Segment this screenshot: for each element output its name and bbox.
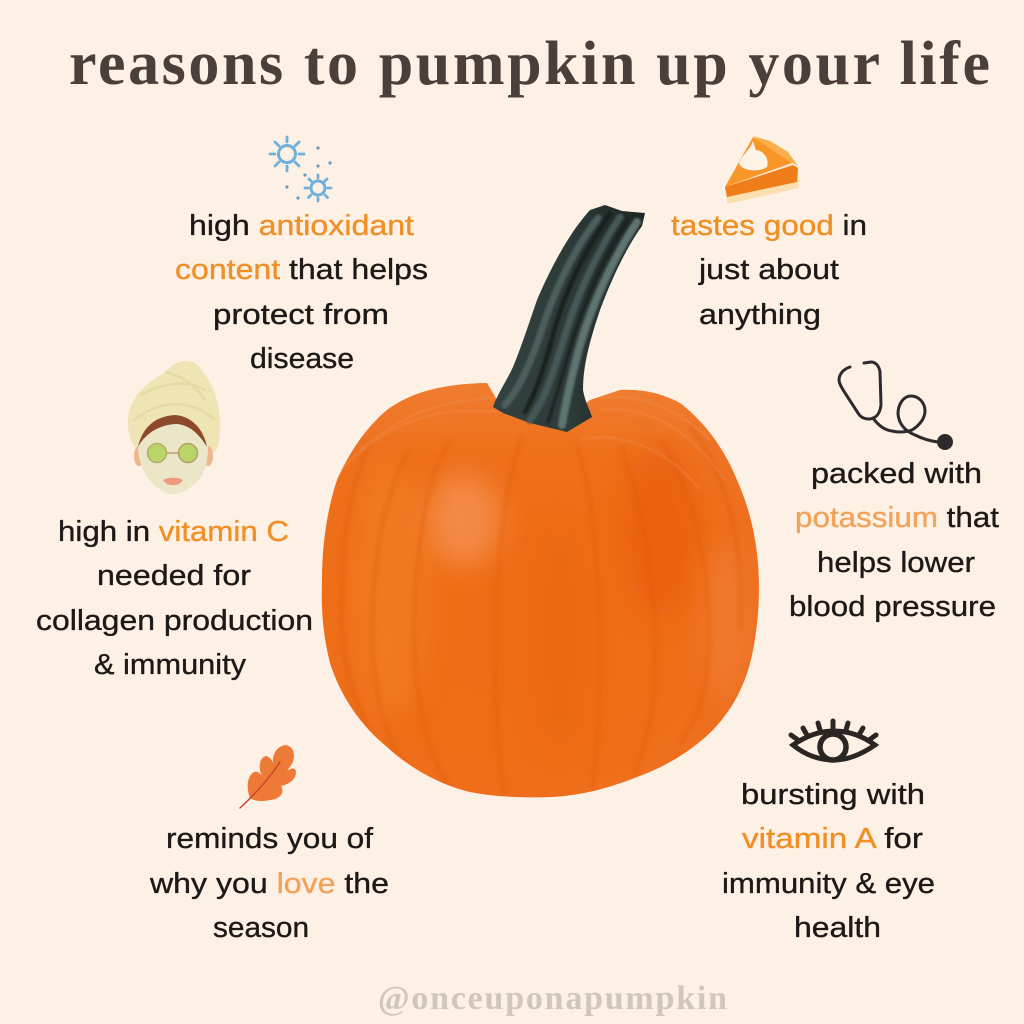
text: vitamin A (722, 779, 935, 944)
text: vitamin A: vitamin A for (742, 823, 923, 855)
text: vitamin C: high in vitamin C (58, 516, 289, 548)
title: reasons to pumpkin up your life (69, 30, 990, 98)
text: antioxidant: high antioxidant (189, 210, 414, 242)
text: love the season: reminds you of (166, 823, 374, 855)
text: love the season: why you love the (149, 868, 389, 900)
text: tastes good (671, 210, 867, 331)
text: potassium: packed with (811, 458, 982, 490)
icon: stethoscope (839, 362, 953, 450)
pumpkin body (310, 375, 770, 805)
text: antioxidant (175, 210, 428, 375)
icon: pumpkin pie (725, 136, 799, 204)
text: love the season: season (213, 912, 309, 944)
text: vitamin C: & immunity (94, 649, 247, 681)
icon: sun particles (270, 137, 332, 201)
text: vitamin A: immunity & eye (722, 868, 935, 900)
pumpkin stem (493, 205, 645, 432)
icon: face mask with towel (128, 361, 220, 494)
text: antioxidant: content that helps (175, 254, 428, 286)
text: antioxidant: disease (250, 343, 354, 375)
text: vitamin C: needed for (97, 560, 251, 592)
text: antioxidant: protect from (213, 299, 389, 331)
icon: autumn leaf (240, 745, 296, 808)
text: potassium: helps lower (817, 547, 975, 579)
pumpkin illustration (310, 205, 770, 805)
text: tastes good: anything (699, 299, 821, 331)
text: potassium: blood pressure (789, 591, 996, 623)
icon: eye (791, 721, 876, 760)
text: potassium (789, 458, 999, 623)
text: potassium: potassium that (795, 502, 999, 534)
text: vitamin C: collagen production (36, 605, 313, 637)
text: love the season (149, 823, 389, 944)
text: tastes good: just about (698, 254, 839, 286)
text: vitamin A: health (794, 912, 881, 944)
text: tastes good: tastes good in (671, 210, 867, 242)
text: vitamin A: bursting with (741, 779, 925, 811)
text: vitamin C (36, 516, 313, 681)
handle: @onceuponapumpkin (378, 980, 727, 1017)
